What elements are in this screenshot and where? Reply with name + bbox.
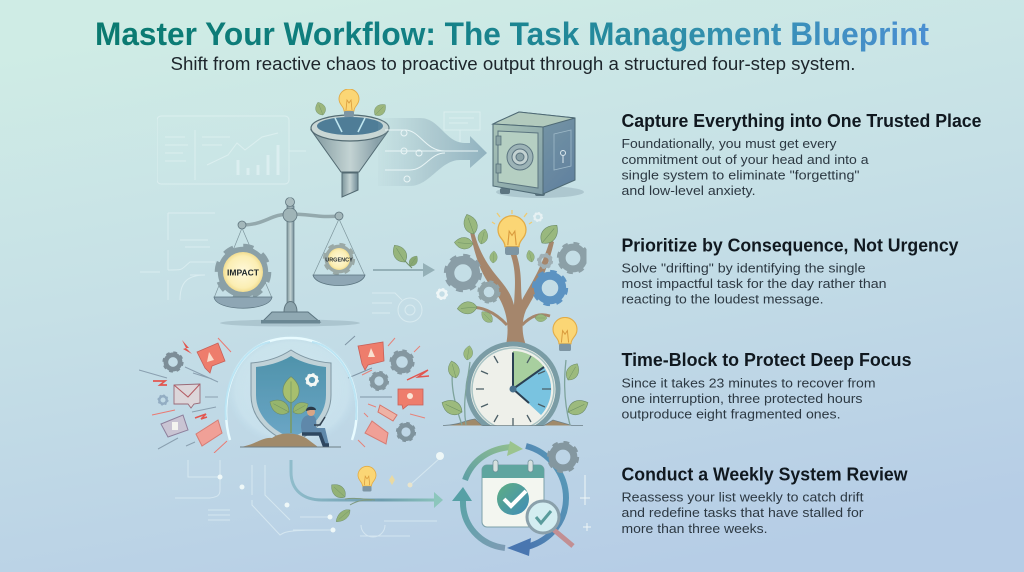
icon: clock — [468, 344, 558, 434]
arrow: data flow — [378, 112, 487, 186]
icon: safe — [493, 112, 584, 198]
icon: impact gear — [214, 248, 272, 308]
title: Master Your Workflow: The Task Management Blueprint — [95, 16, 929, 52]
step 3 text: one interruption, three protected hours — [622, 392, 862, 406]
illustration: shield with distractions and clock — [139, 317, 591, 453]
step 1 text: Foundationally, you must get every — [622, 137, 837, 151]
step 3 text: Time-Block to Protect Deep Focus — [622, 350, 912, 370]
icon: small light bulb — [358, 466, 376, 492]
illustration: capture funnel to safe — [157, 89, 584, 198]
icon: balance scale — [214, 198, 365, 326]
step 1 text: commitment out of your head and into a — [622, 153, 868, 167]
step 1 text — [622, 111, 982, 198]
step 4 text: and redefine tasks that have stalled for — [622, 506, 864, 520]
step 2 text: Solve "drifting" by identifying the single — [622, 262, 866, 276]
plants and bulb — [439, 317, 591, 425]
step 4 text: Conduct a Weekly System Review — [622, 464, 908, 484]
icon: urgency gear — [313, 246, 365, 286]
ghost circuit — [140, 213, 215, 300]
step 3 text — [622, 350, 912, 422]
ghost dashboard — [157, 116, 306, 184]
step 2 text: reacting to the loudest message. — [622, 292, 824, 306]
icon: person on mound — [240, 407, 341, 447]
illustration: weekly review — [175, 441, 591, 556]
step 1 text: single system to eliminate "forgetting" — [622, 168, 860, 182]
arrow: growth path — [291, 460, 443, 525]
icon: light bulb — [339, 89, 359, 117]
ground — [443, 419, 583, 426]
ghost circuit — [175, 460, 437, 537]
icon: tree with gears — [437, 210, 586, 345]
distractions left — [139, 338, 231, 453]
icon: urgency gear: URGENCY — [325, 258, 353, 264]
icon: impact gear: IMPACT — [227, 268, 260, 278]
step 4 text — [622, 464, 908, 536]
step 3 text: Since it takes 23 minutes to recover from — [622, 376, 876, 390]
step 3 text: outproduce eight fragmented ones. — [622, 408, 840, 422]
step 2 text — [622, 236, 958, 306]
step 4 text: Reassess your list weekly to catch drift — [622, 490, 864, 504]
ghost target — [372, 293, 422, 322]
icon: leaves — [313, 101, 389, 118]
subtitle: Shift from reactive chaos to proactive output through a structured four-step system. — [170, 54, 856, 74]
glow dome — [226, 334, 358, 447]
step 2 text: Prioritize by Consequence, Not Urgency — [622, 236, 958, 256]
step 4 text: more than three weeks. — [622, 522, 768, 536]
icon: funnel — [311, 115, 389, 197]
step 2 text: most impactful task for the day rather than — [622, 277, 886, 291]
step 1 text: Capture Everything into One Trusted Place — [622, 111, 982, 131]
step 1 text: and low-level anxiety. — [622, 184, 756, 198]
arrow: scale to tree — [373, 242, 435, 277]
icon: review cycle — [452, 441, 591, 556]
illustration: prioritize scale and tree — [140, 198, 586, 345]
distractions right — [345, 336, 429, 447]
icon: shield — [251, 350, 331, 443]
